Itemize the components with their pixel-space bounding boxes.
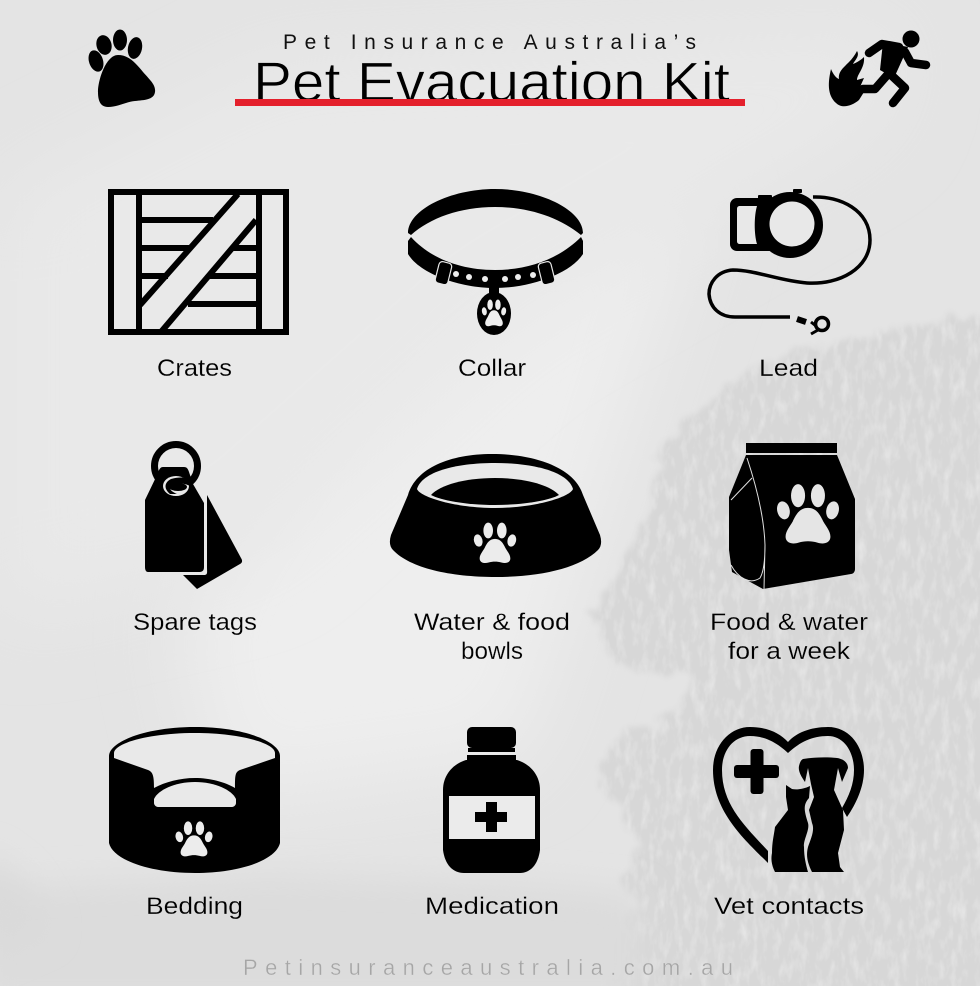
label: bedding: Bedding xyxy=(146,893,243,920)
label: food and water for a week xyxy=(710,609,868,665)
subtitle: Pet Insurance Australia’s xyxy=(283,31,696,54)
label: collar: Collar xyxy=(458,355,526,382)
label: crates: Crates xyxy=(157,355,232,382)
label: water and food bowls xyxy=(414,609,570,665)
icon: medication bottle xyxy=(443,727,540,873)
icon: food bag xyxy=(729,443,855,589)
label: vet contacts: Vet contacts xyxy=(714,893,864,920)
label: food and water for a week: Food & water xyxy=(710,609,868,636)
title xyxy=(253,31,730,113)
label: water and food bowls: Water & food xyxy=(414,609,570,636)
tree silhouette xyxy=(590,315,980,986)
icon: paw print xyxy=(86,30,155,107)
label: water and food bowls: bowls xyxy=(461,638,523,665)
icon: spare tags xyxy=(145,444,242,589)
red underline xyxy=(235,99,745,106)
icon: crate xyxy=(111,192,286,332)
icon: bowl xyxy=(390,454,601,577)
main heading: Pet Evacuation Kit xyxy=(253,50,730,113)
label: food and water for a week: for a week xyxy=(728,638,851,665)
label: spare tags: Spare tags xyxy=(133,609,257,636)
label: medication: Medication xyxy=(425,893,559,920)
footer url: Petinsuranceaustralia.com.au xyxy=(243,955,733,980)
icon: vet heart with cat and dog xyxy=(713,727,864,872)
icon: pet bed xyxy=(109,727,280,873)
icon: retractable lead xyxy=(709,189,870,334)
ground xyxy=(0,875,640,986)
icon: running person with fire xyxy=(829,30,926,106)
icon: collar xyxy=(408,189,583,335)
label: lead: Lead xyxy=(759,355,818,382)
